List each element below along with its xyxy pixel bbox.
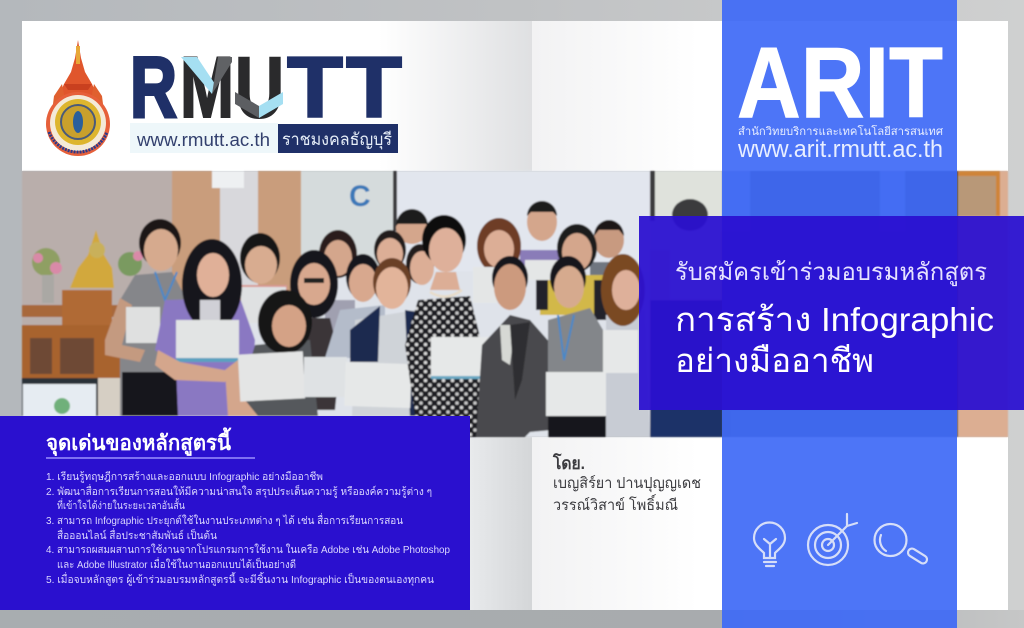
text: presenter credits: โดย.	[552, 453, 585, 473]
text: ARIT website: www.arit.rmutt.ac.th	[737, 136, 943, 163]
panel: course highlights	[0, 416, 470, 610]
main woman in check dress	[405, 296, 482, 437]
flowers	[32, 248, 60, 276]
list: course highlights: 2. พัฒนาสื่อการเรียนการสอนให้มีความน่าสนใจ สรุปประเด็นความรู้ หรือองค์ความรู้ต่าง ๆ	[46, 484, 432, 498]
title: main line one: การสร้าง Infographic	[675, 301, 994, 338]
list: course highlights: 4. สามารถผสมผสานการใช้งานจากโปรแกรมการใช้งาน ในเครือ Adobe เช่น Adobe Photoshop	[46, 543, 450, 556]
list: course highlights: 3. สามารถ Infographic ประยุกต์ใช้ในงานประเภทต่าง ๆ ได้ เช่น สื่อการเรียนการสอน	[46, 513, 403, 527]
text: ARIT full name: สำนักวิทยบริการและเทคโนโลยีสารสนเทศ	[738, 124, 943, 138]
list: course highlights: และ Adobe Illustrator เมื่อใช้ในงานออกแบบได้เป็นอย่างดี	[57, 557, 296, 571]
list: course highlights	[46, 470, 450, 586]
woman in grey shirt	[548, 308, 606, 375]
icon: light bulb	[754, 522, 785, 566]
man in grey	[120, 272, 187, 416]
text: presenter credits: เบญสิร์ยา ปานปุญญเดช	[553, 475, 701, 493]
logo: website strip: www.rmutt.ac.th	[136, 130, 270, 150]
right wall	[722, 171, 958, 437]
furniture	[22, 305, 122, 317]
back row	[520, 250, 565, 280]
logo: RMUTT wordmark: M	[180, 40, 234, 136]
page shadow	[0, 610, 1024, 628]
logo: RMUTT wordmark	[130, 40, 402, 136]
list: course highlights: ที่เข้าใจได้ง่ายในระยะเวลาอันสั้น	[57, 498, 185, 512]
counter and monitor	[98, 378, 128, 416]
logo: RMUTT wordmark: U	[235, 40, 284, 136]
logo: RMUTT wordmark: R	[130, 40, 177, 136]
panel: bottom page	[470, 437, 1008, 610]
woman in front	[230, 340, 318, 416]
photo: group of course participants: C	[349, 180, 371, 213]
panel: top white page right	[532, 21, 1008, 171]
logo: RMUTT wordmark: T	[346, 40, 402, 136]
icon: magnifier	[874, 524, 929, 565]
emblem: RMUTT seal	[46, 40, 110, 156]
text: presenter credits: วรรณ์วิสาข์ โพธิ์มณี	[553, 494, 678, 514]
icon: target	[808, 514, 857, 565]
woman in glasses	[298, 318, 340, 410]
panel: ARIT blue column	[722, 0, 957, 628]
photo: group of course participants	[22, 171, 1008, 437]
title: main line two: อย่างมืออาชีพ	[675, 342, 874, 379]
woman in stripes	[325, 305, 385, 358]
woman on right	[606, 310, 650, 437]
logo: RMUTT wordmark: T	[287, 40, 343, 136]
list: course highlights: 5. เมื่อจบหลักสูตร ผู้เข้าร่วมอบรมหลักสูตรนี้ จะมีชิ้นงาน Infographic เป็นของตนเองทุกคน	[46, 572, 434, 586]
title: intro line: รับสมัครเข้าร่วมอบรมหลักสูตร	[675, 259, 987, 287]
buddha	[70, 230, 114, 288]
woman in lilac	[155, 298, 255, 416]
logo: website strip	[130, 123, 398, 153]
list: course highlights: สื่อออนไลน์ สื่อประชาสัมพันธ์ เป็นต้น	[57, 528, 217, 542]
heading: ARIT: ARIT	[737, 27, 943, 139]
list: course highlights: 1. เรียนรู้ทฤษฎีการสร้างและออกแบบ Infographic อย่างมืออาชีพ	[46, 470, 323, 483]
panel: top white page left	[22, 21, 532, 171]
woman in navy jacket	[352, 310, 420, 416]
text: presenter credits	[552, 453, 701, 514]
woman in grey blazer	[476, 315, 552, 437]
heading: course highlights: จุดเด่นของหลักสูตรนี้	[46, 427, 232, 457]
certificates back	[473, 267, 497, 303]
panel: title box	[639, 216, 1024, 410]
logo: website strip: ราชมงคลธัญบุรี	[282, 130, 392, 150]
